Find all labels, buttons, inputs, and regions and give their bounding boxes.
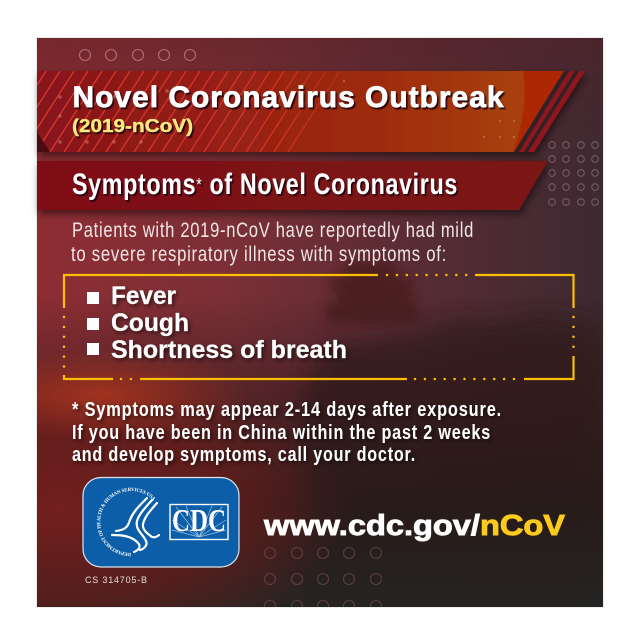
glow: lower left	[37, 412, 328, 607]
title text: Novel Coronavirus Outbreak	[72, 81, 504, 114]
banner red end	[37, 71, 564, 152]
corner triangle	[37, 132, 50, 152]
heading text: *	[196, 175, 202, 195]
decorative circles: right grid	[549, 142, 598, 205]
intro text: Patients with 2019-nCoV have reportedly had mild	[72, 219, 474, 242]
footnote text: If you have been in China within the past 2 weeks	[72, 422, 491, 444]
decorative circles: top row	[80, 50, 196, 60]
panel: background	[37, 38, 603, 607]
eagle	[112, 498, 159, 552]
title banner	[0, 71, 600, 152]
intro text: to severe respiratory illness with symptoms of:	[71, 243, 447, 266]
icon: HHS seal	[96, 488, 160, 556]
document code: CS 314705-B	[85, 575, 147, 585]
badge background	[83, 478, 239, 567]
footnote text: and develop symptoms, call your doctor.	[72, 444, 416, 466]
symptoms box	[64, 275, 574, 379]
decorative circles: bottom grid	[264, 548, 382, 612]
symptom list	[87, 282, 347, 364]
CDC wordmark: CDC	[172, 502, 226, 538]
symptom labels: Cough	[111, 309, 189, 337]
website URL: www.cdc.gov/ nCoV	[263, 510, 566, 542]
footnote text	[72, 399, 502, 466]
symptom labels	[111, 282, 347, 364]
heading text: of Novel Coronavirus	[202, 168, 458, 201]
diagonal stripes	[37, 71, 340, 152]
bullet squares	[87, 292, 99, 355]
symptom labels: Shortness of breath	[111, 336, 347, 364]
banner shape	[37, 71, 585, 152]
seal ring text: DEPARTMENT OF HEALTH & HUMAN SERVICES USA	[96, 488, 155, 556]
panel edge	[37, 38, 603, 607]
CDC rays	[172, 506, 226, 537]
blurred pagoda silhouette	[326, 262, 418, 322]
heading text: Symptoms	[72, 168, 233, 201]
blurred tree line	[296, 312, 600, 488]
footnote text: * Symptoms may appear 2-14 days after exposure.	[72, 399, 502, 421]
banner shape	[37, 161, 548, 210]
CDC logo	[170, 502, 228, 540]
intro text	[71, 219, 474, 266]
infographic	[33, 38, 604, 608]
symptom labels: Fever	[111, 282, 176, 310]
logo badge	[82, 476, 240, 568]
yellow dashed frame	[64, 275, 574, 379]
banner dots	[58, 80, 515, 144]
subtitle text: (2019-nCoV)	[72, 116, 193, 136]
section heading banner	[37, 161, 548, 210]
